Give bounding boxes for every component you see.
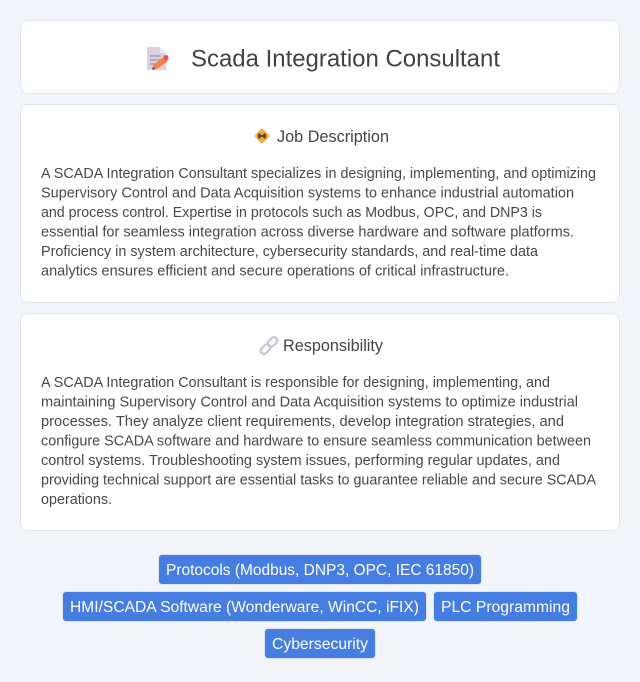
icon: document with pencil [147,47,168,70]
text block: job description: and process control. Expertise in protocols such as Modbus, OPC, and DNP3 is [41,205,542,221]
text block: job description: A SCADA Integration Consultant specializes in designing, implementing, and optimizing [41,166,596,182]
text block: responsibility: maintaining Supervisory Control and Data Acquisition systems to optimize industrial [41,394,578,410]
tag: protocols: Protocols (Modbus, DNP3, OPC, IEC 61850) [166,562,474,579]
panel: job description [20,104,620,302]
text block: job description: Proficiency in system architecture, cybersecurity standards, and real-time data [41,244,538,260]
heading: job description: Job Description [277,128,389,146]
tag: plc programming [434,592,578,622]
panel: title card [20,20,620,94]
tag: hmi/scada software [62,592,426,622]
tag: protocols [158,554,482,584]
text block: responsibility: operations. [41,492,112,508]
title: Scada Integration Consultant [191,46,500,72]
text block: responsibility: configure SCADA software and hardware to ensure seamless communication between [41,434,591,450]
text block: job description: Supervisory Control and Data Acquisition systems to enhance industrial automation [41,186,574,202]
tag: plc programming: PLC Programming [441,599,570,616]
skill tags [62,554,578,658]
text block: responsibility: processes. They analyze client requirements, develop integration strategies, and [41,414,564,430]
text block: responsibility: A SCADA Integration Consultant is responsible for designing, implementing, and [41,375,550,391]
text block: responsibility: providing technical support are essential tasks to guarantee reliable and secure SCADA [41,472,596,488]
icon: diamond sign [254,128,270,144]
tag: hmi/scada software: HMI/SCADA Software (Wonderware, WinCC, iFIX) [70,599,419,616]
icon: chain link [259,336,279,355]
tag: cybersecurity [264,628,376,658]
tag: cybersecurity: Cybersecurity [272,636,368,653]
text block: responsibility: control systems. Troubleshooting system issues, performing regular updates, and [41,453,560,469]
heading: responsibility: Responsibility [283,337,384,355]
text block: responsibility [41,375,596,508]
text block: job description: essential for seamless integration across diverse hardware and software platforms. [41,224,574,240]
panel: responsibility [20,314,620,530]
text block: job description [41,166,596,280]
text block: job description: analytics ensures efficient and secure operations of critical infrastructure. [41,264,509,280]
